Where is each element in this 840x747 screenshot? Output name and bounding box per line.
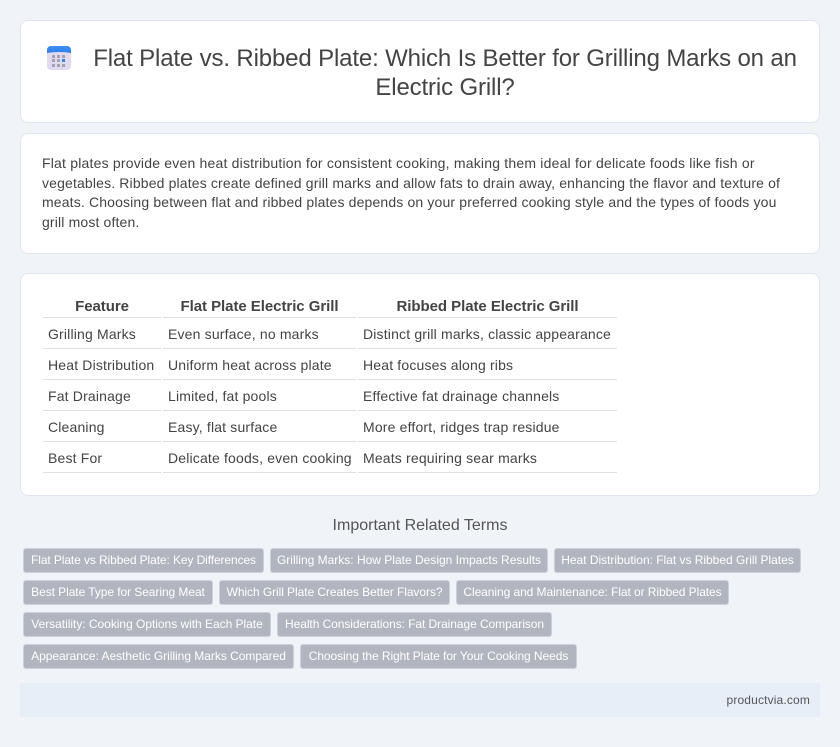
related terms tags: Health Considerations: Fat Drainage Comparison (285, 617, 544, 631)
related terms tags: Heat Distribution: Flat vs Ribbed Grill Plates (561, 553, 794, 567)
related terms tags: Versatility: Cooking Options with Each Plate (31, 617, 263, 631)
related terms tags: Grilling Marks: How Plate Design Impacts Results (277, 553, 541, 567)
comparison table: Effective fat drainage channels (363, 388, 559, 404)
text: summary paragraph: vegetables. Ribbed plates create defined grill marks and allow fats to drain away, enhancing the flavor and texture of (42, 175, 780, 191)
comparison table: Even surface, no marks (168, 326, 319, 342)
heading: related terms: Important Related Terms (333, 517, 507, 534)
comparison table: Heat focuses along ribs (363, 357, 513, 373)
panel: title header (20, 20, 820, 123)
text: summary paragraph (42, 155, 780, 230)
comparison table: Best For (48, 450, 102, 466)
icon: calendar (47, 46, 71, 70)
comparison table (43, 298, 617, 473)
comparison table: Uniform heat across plate (168, 357, 332, 373)
related terms tags: Appearance: Aesthetic Grilling Marks Compared (31, 649, 286, 663)
related terms tags: Best Plate Type for Searing Meat (31, 585, 205, 599)
comparison table: Cleaning (48, 419, 105, 435)
footer bar (20, 683, 820, 717)
panel: comparison table (20, 273, 820, 496)
text: summary paragraph: grill most often. (42, 214, 139, 230)
text: summary paragraph: meats. Choosing between flat and ribbed plates depends on your preferred cooking style and the types of foods you (42, 194, 777, 210)
comparison table: Limited, fat pools (168, 388, 277, 404)
comparison table: Meats requiring sear marks (363, 450, 537, 466)
comparison table: Easy, flat surface (168, 419, 277, 435)
comparison table: More effort, ridges trap residue (363, 419, 560, 435)
heading: title: Flat Plate vs. Ribbed Plate: Which Is Better for Grilling Marks on an (93, 45, 797, 72)
comparison table: Ribbed Plate Electric Grill (396, 298, 579, 315)
heading: title: Electric Grill? (375, 74, 515, 101)
heading: title (93, 45, 797, 101)
related terms tags: Cleaning and Maintenance: Flat or Ribbed Plates (463, 585, 722, 599)
comparison table: Flat Plate Electric Grill (180, 298, 338, 315)
comparison table: Heat Distribution (48, 357, 154, 373)
comparison table: Distinct grill marks, classic appearance (363, 326, 611, 342)
text: summary paragraph: Flat plates provide even heat distribution for consistent cooking, making them ideal for delicate foods like fish or (42, 155, 755, 171)
related terms tags: Which Grill Plate Creates Better Flavors? (227, 585, 442, 599)
footer: source: productvia.com (727, 693, 810, 707)
comparison table: Delicate foods, even cooking (168, 450, 352, 466)
comparison table: Feature (75, 298, 129, 315)
comparison table: Fat Drainage (48, 388, 131, 404)
comparison table: Grilling Marks (48, 326, 136, 342)
panel: summary (20, 133, 820, 254)
related terms tags (23, 548, 801, 669)
related terms tags: Flat Plate vs Ribbed Plate: Key Differences (31, 553, 256, 567)
related terms tags: Choosing the Right Plate for Your Cooking Needs (309, 649, 568, 663)
